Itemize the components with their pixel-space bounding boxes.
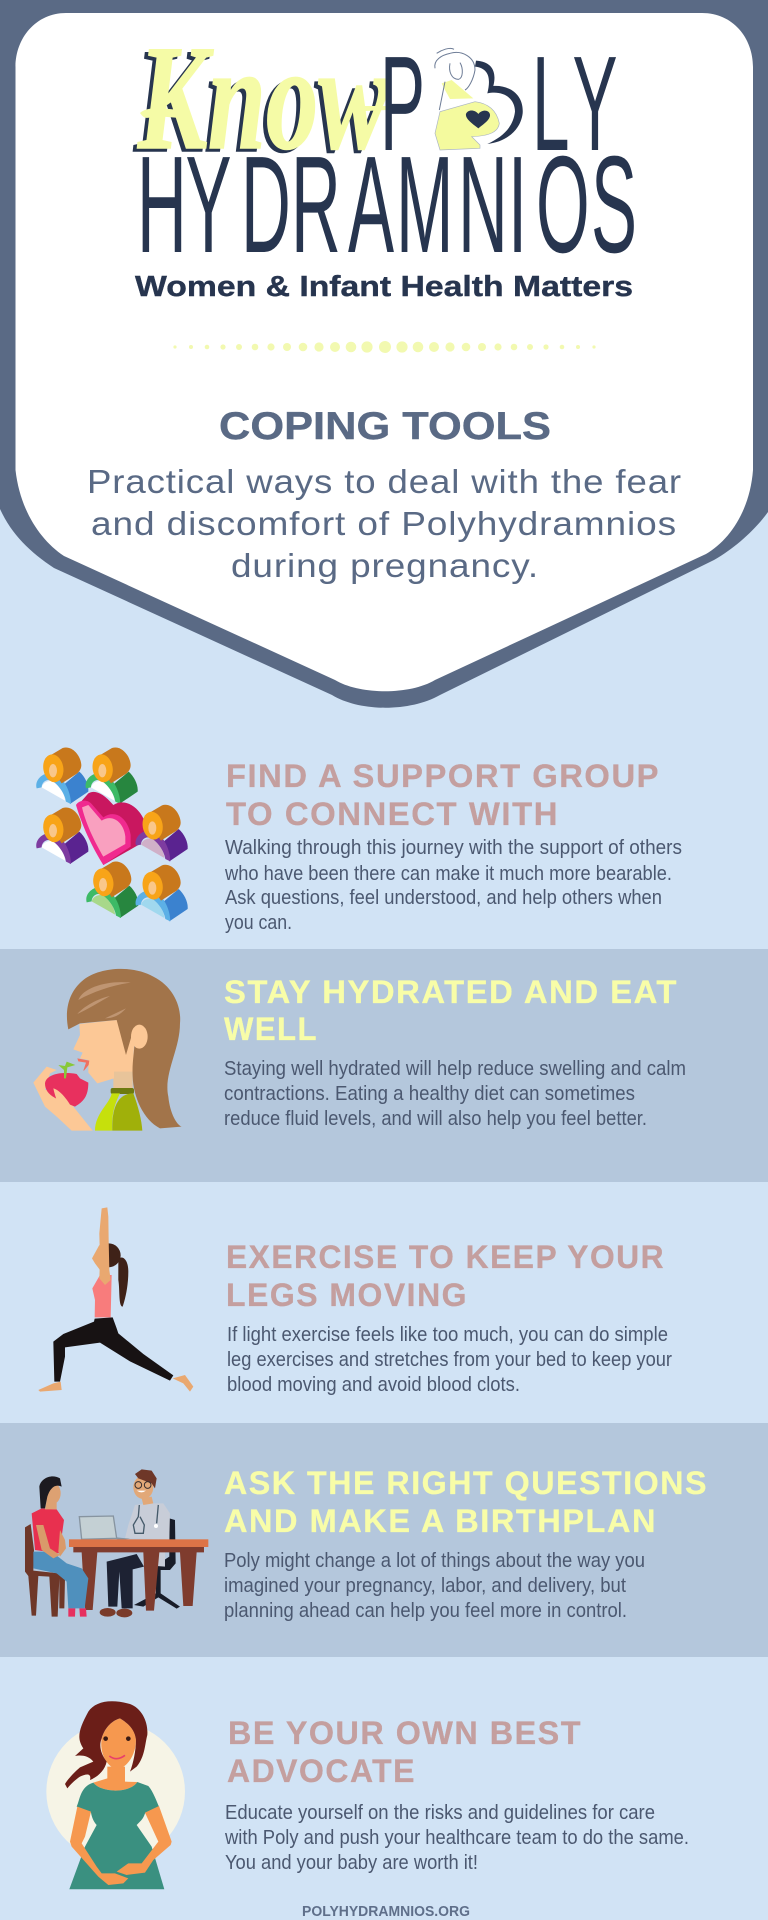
panel: questions	[0, 1423, 768, 1657]
patient shirt	[32, 1508, 64, 1553]
circle backdrop	[46, 1722, 185, 1861]
ear	[131, 1025, 148, 1049]
body text: who have been there can make it much more bearable.	[224, 862, 672, 885]
heading: ASK THE RIGHT QUESTIONS	[224, 1465, 708, 1501]
body text: Walking through this journey with the support of others	[225, 836, 682, 859]
body text: If light exercise feels like too much, you can do simple	[227, 1323, 668, 1346]
heading: EXERCISE TO KEEP YOUR	[226, 1239, 665, 1275]
doctor shoes	[100, 1608, 116, 1617]
heading: coping tools: COPING TOOLS	[219, 405, 551, 448]
neck	[113, 1070, 133, 1090]
band	[0, 949, 768, 1182]
patient jeans	[33, 1552, 88, 1608]
glasses	[135, 1482, 151, 1488]
laptop	[79, 1516, 117, 1539]
patient chair	[25, 1524, 65, 1617]
mouth	[77, 1058, 89, 1071]
panel: advocate	[46, 1701, 689, 1889]
leggings	[53, 1317, 173, 1382]
desk	[73, 1547, 204, 1611]
smile	[137, 1491, 146, 1492]
hair	[65, 1701, 147, 1788]
body text: you can.	[225, 911, 292, 934]
leaf	[58, 1062, 75, 1078]
hand behind apple	[33, 1067, 93, 1131]
logo word: Know: Know	[137, 15, 389, 181]
subtitle: and discomfort of Polyhydramnios	[91, 506, 677, 543]
subtitle	[87, 464, 682, 585]
patient arms	[36, 1525, 66, 1558]
header panel white	[16, 13, 753, 691]
icon: yoga pose	[38, 1207, 193, 1392]
panel: hydration	[0, 949, 768, 1182]
subtitle: during pregnancy.	[231, 548, 539, 585]
heading: BE YOUR OWN BEST	[228, 1715, 582, 1751]
panel: exercise	[38, 1207, 672, 1396]
body text: You and your baby are worth it!	[225, 1851, 478, 1874]
body text: planning ahead can help you feel more in control.	[224, 1599, 627, 1622]
body text: Ask questions, feel understood, and help others when	[225, 886, 662, 909]
face	[101, 1718, 136, 1769]
body text	[224, 1801, 689, 1874]
outline: hair and face	[435, 48, 475, 110]
band	[0, 1423, 768, 1657]
logo figure	[435, 48, 523, 150]
logo word: Know shadow: Know	[133, 18, 385, 184]
top	[92, 1275, 112, 1317]
smile	[109, 1755, 125, 1759]
heading: WELL	[224, 1011, 318, 1047]
logo word: Hydramnios: HYDRAMNIOS	[137, 128, 637, 282]
hair highlights	[77, 982, 131, 1018]
fingers	[53, 1088, 75, 1113]
icon: patient and doctor at desk	[25, 1469, 208, 1617]
logo letter P: P	[380, 27, 425, 179]
logo letters LY: LY	[532, 27, 618, 179]
heading: AND MAKE A BIRTHPLAN	[224, 1503, 657, 1539]
hair	[97, 1243, 121, 1267]
body text: contractions. Eating a healthy diet can sometimes	[224, 1082, 635, 1105]
body text: with Poly and push your healthcare team to do the same.	[224, 1826, 689, 1849]
heading: ADVOCATE	[227, 1753, 416, 1789]
body text	[227, 1323, 672, 1396]
dress	[69, 1782, 164, 1889]
header panel outline	[0, 0, 768, 708]
body text	[224, 1549, 645, 1622]
body text: leg exercises and stretches from your bed to keep your	[227, 1348, 672, 1371]
body text	[224, 836, 682, 934]
heart half	[475, 61, 523, 144]
collar	[111, 1088, 134, 1094]
body text	[224, 1057, 686, 1130]
arms	[99, 1207, 111, 1285]
stethoscope	[133, 1505, 158, 1533]
body text: blood moving and avoid blood clots.	[227, 1373, 520, 1396]
patient hair	[39, 1476, 62, 1508]
dotted divider	[173, 341, 596, 353]
body text: Educate yourself on the risks and guidelines for care	[225, 1801, 655, 1824]
heading	[227, 1715, 582, 1789]
tagline: Women & Infant Health Matters	[135, 271, 633, 303]
face	[73, 1020, 135, 1083]
heading	[224, 974, 678, 1047]
logo swash	[140, 106, 387, 118]
doctor head	[142, 1497, 153, 1505]
top	[95, 1093, 120, 1131]
panel: support group	[36, 747, 682, 934]
sleeve	[442, 80, 473, 99]
doctor coat	[125, 1503, 170, 1567]
hair	[67, 969, 182, 1128]
heading: LEGS MOVING	[226, 1277, 468, 1313]
heading: TO CONNECT WITH	[226, 796, 559, 832]
heading	[226, 758, 660, 832]
logo	[133, 15, 637, 282]
patient shoes	[68, 1608, 87, 1617]
heading	[226, 1239, 665, 1313]
icon: people around a heart	[36, 747, 188, 921]
doctor hair	[135, 1469, 157, 1488]
body text: imagined your pregnancy, labor, and delivery, but	[224, 1574, 626, 1597]
feet	[38, 1375, 193, 1392]
doctor chair	[134, 1518, 180, 1609]
icon: woman eating apple	[33, 969, 182, 1131]
belly	[435, 102, 499, 150]
apple	[45, 1073, 88, 1107]
face	[92, 1245, 103, 1270]
body text: Poly might change a lot of things about the way you	[224, 1549, 645, 1572]
heading: STAY HYDRATED AND EAT	[224, 974, 678, 1010]
body text: reduce fluid levels, and will also help you feel better.	[224, 1107, 647, 1130]
body text: Staying well hydrated will help reduce swelling and calm	[224, 1057, 686, 1080]
chest and neck	[93, 1767, 137, 1791]
eyes	[103, 1736, 131, 1741]
heading	[224, 1465, 708, 1539]
doctor legs	[107, 1554, 144, 1608]
heading: FIND A SUPPORT GROUP	[226, 758, 660, 794]
ponytail	[118, 1257, 128, 1307]
arms	[70, 1806, 172, 1885]
patient head	[45, 1500, 57, 1509]
belly heart	[466, 110, 490, 128]
subtitle: Practical ways to deal with the fear	[87, 464, 682, 501]
footer url: POLYHYDRAMNIOS.ORG	[302, 1904, 470, 1920]
icon: pregnant woman	[46, 1701, 185, 1889]
